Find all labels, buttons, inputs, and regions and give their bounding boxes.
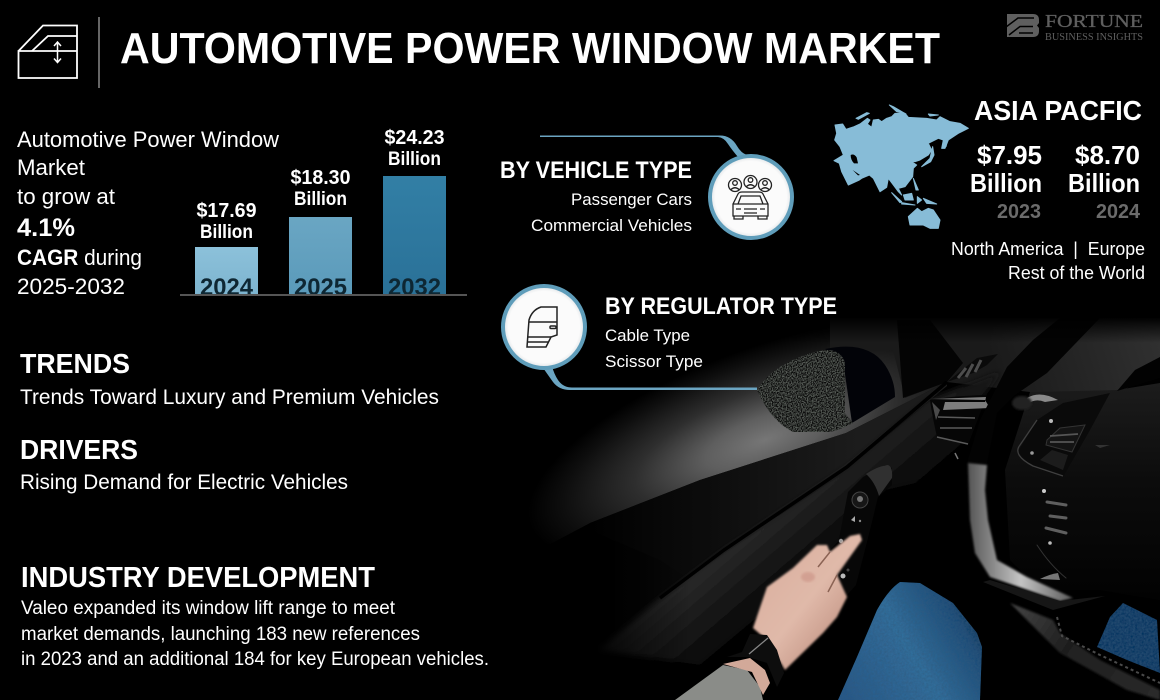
- header divider: [98, 17, 100, 88]
- photo: small triangular vent: [947, 354, 998, 382]
- other regions: [951, 239, 1145, 283]
- label: by regulator type: [605, 293, 837, 371]
- CAGR text block: 2025-2032: [17, 274, 125, 299]
- bar 2024: [195, 200, 258, 301]
- photo: round dash vent highlight: [1012, 394, 1058, 410]
- photo: door armrest band: [598, 372, 1000, 665]
- icon: regulator type circle: [503, 286, 585, 368]
- other regions: Rest of the World: [1008, 263, 1145, 283]
- bar chart: market size: [180, 127, 467, 301]
- other regions: North America | Europe: [951, 239, 1145, 259]
- CAGR text block: Automotive Power Window: [17, 127, 279, 152]
- title: AUTOMOTIVE POWER WINDOW MARKET: [120, 24, 940, 73]
- bar 2032: Billion: [388, 149, 441, 170]
- label: by vehicle type: Commercial Vehicles: [531, 216, 692, 235]
- label: by vehicle type: BY VEHICLE TYPE: [500, 157, 692, 184]
- region value 2023: 2023: [997, 201, 1041, 223]
- drivers: Rising Demand for Electric Vehicles: [20, 471, 348, 494]
- connector: regulator type: [541, 365, 757, 390]
- industry development: market demands, launching 183 new references: [21, 624, 420, 645]
- industry development: in 2023 and an additional 184 for key European vehicles.: [21, 649, 489, 670]
- photo: window glass: [520, 320, 1000, 560]
- industry development: INDUSTRY DEVELOPMENT: [21, 562, 375, 594]
- bar 2025: $18.30: [290, 167, 350, 189]
- label: by vehicle type: Passenger Cars: [571, 190, 692, 209]
- photo: top fade: [520, 317, 1160, 343]
- photo: steering spoke controls: [1017, 393, 1110, 477]
- photo: left fade: [520, 530, 690, 700]
- industry development: Valeo expanded its window lift range to meet: [21, 598, 396, 619]
- photo: window switch panel: [818, 465, 892, 612]
- region value 2023: Billion: [970, 168, 1042, 198]
- icon: vehicle type circle: [710, 156, 792, 238]
- region value 2024: Billion: [1068, 168, 1140, 198]
- photo: lower rim: [1010, 603, 1160, 700]
- bar 2032: $24.23: [384, 127, 444, 149]
- bar 2032: 2032: [388, 274, 441, 301]
- photo: hand: [753, 534, 862, 670]
- drivers: [20, 434, 348, 494]
- region value 2023: $7.95: [977, 140, 1042, 170]
- CAGR text block: Market: [17, 155, 85, 180]
- trends: Trends Toward Luxury and Premium Vehicles: [20, 386, 439, 409]
- trends: TRENDS: [20, 348, 130, 379]
- label: by regulator type: BY REGULATOR TYPE: [605, 293, 837, 320]
- CAGR text block: [17, 127, 279, 299]
- header icon: car window with arrow: [18, 26, 77, 78]
- photo: jeans: [838, 582, 1160, 700]
- region value 2024: $8.70: [1075, 140, 1140, 170]
- photo: car interior with hand on window switch: [520, 317, 1160, 700]
- photo: spoke slats: [1037, 489, 1066, 580]
- photo: sleeve: [675, 665, 763, 700]
- bar 2024: $17.69: [196, 200, 256, 222]
- region value 2024: [1068, 140, 1141, 223]
- photo: steering hub: [1005, 383, 1160, 600]
- map: Asia Pacific: [834, 105, 968, 228]
- drivers: DRIVERS: [20, 434, 138, 465]
- photo: wrist: [723, 658, 770, 695]
- region heading: ASIA PACFIC: [974, 95, 1142, 126]
- photo: watch: [727, 634, 784, 687]
- region value 2023: [970, 140, 1042, 223]
- bar 2024: 2024: [200, 274, 254, 301]
- photo: A-pillar: [897, 320, 963, 398]
- photo: steering wheel rim: [967, 318, 1100, 463]
- photo: chrome wheel trim: [968, 463, 1073, 601]
- connector: vehicle type: [540, 136, 747, 157]
- photo: side mirror: [757, 347, 895, 432]
- photo: airbag highlight: [1095, 445, 1110, 448]
- bar 2025: [289, 167, 352, 301]
- photo: background behind windshield: [830, 318, 1160, 398]
- CAGR text block: 4.1%: [17, 214, 75, 242]
- region value 2024: 2024: [1096, 201, 1141, 223]
- logo: Fortune Business Insights: FORTUNE: [1045, 11, 1143, 31]
- label: by regulator type: Scissor Type: [605, 352, 703, 371]
- bar 2025: Billion: [294, 189, 347, 210]
- bar 2025: 2025: [294, 274, 347, 301]
- industry development: [21, 562, 489, 670]
- photo: door crease line: [660, 382, 947, 598]
- bar 2032: [383, 127, 446, 301]
- label: by vehicle type: [500, 157, 692, 235]
- photo: air vent: [930, 395, 990, 459]
- photo: door upper strip: [590, 382, 947, 650]
- CAGR text block: CAGR during: [17, 245, 142, 270]
- bar 2024: Billion: [200, 222, 253, 243]
- label: by regulator type: Cable Type: [605, 326, 690, 345]
- trends: [20, 348, 439, 409]
- logo: Fortune Business Insights: BUSINESS INSIGHTS: [1045, 32, 1143, 43]
- logo: Fortune Business Insights: [1006, 11, 1143, 43]
- CAGR text block: to grow at: [17, 184, 115, 209]
